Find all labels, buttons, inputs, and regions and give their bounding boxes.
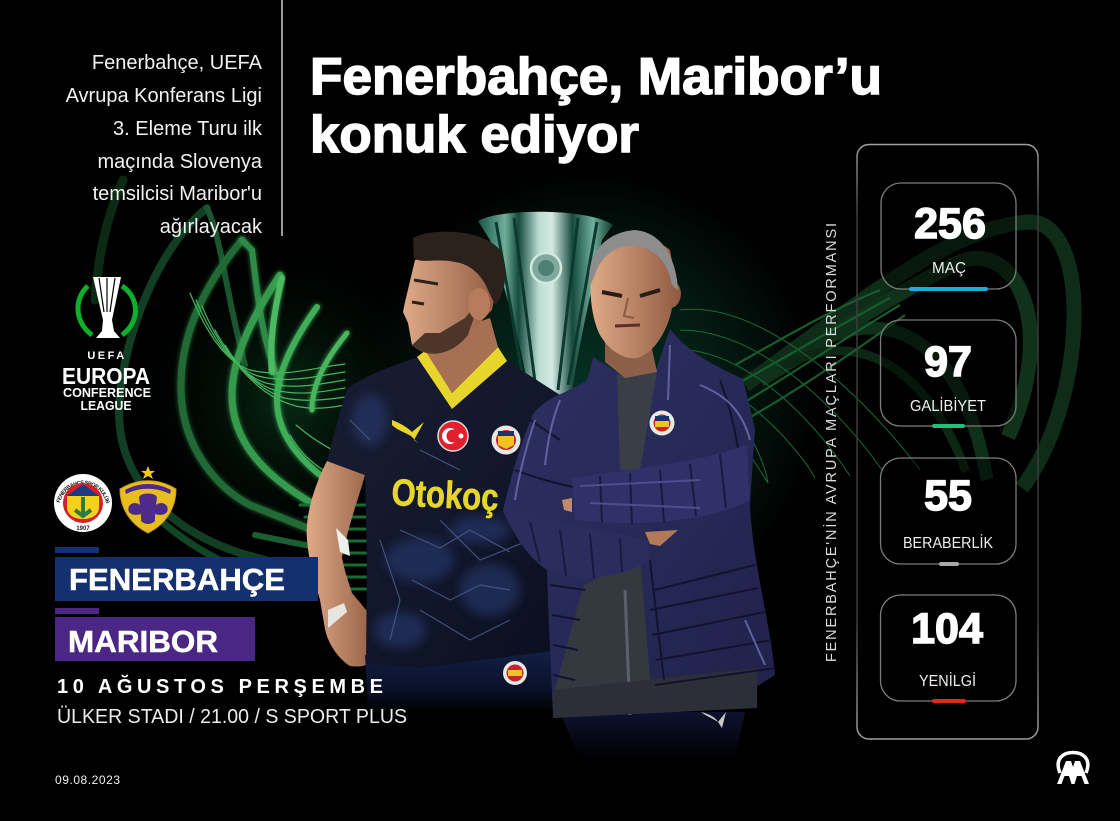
- neck and face: [426, 318, 498, 393]
- match venue: ÜLKER STADI / 21.00 / S SPORT PLUS: [57, 706, 407, 728]
- team bar: fenerbahce: [55, 547, 318, 601]
- player hair: [413, 232, 505, 305]
- title: Fenerbahçe, Maribor’u: [310, 48, 882, 106]
- quilt seams: [515, 380, 775, 685]
- intro text: Fenerbahçe, UEFA: [92, 52, 263, 74]
- intro text: maçında Slovenya: [97, 151, 263, 173]
- forearm lower: [505, 508, 650, 577]
- stat card: wins: GALİBİYET: [910, 396, 986, 415]
- manager: [503, 230, 775, 760]
- jacket highlights: [515, 345, 765, 665]
- green swirl right: [680, 222, 1074, 488]
- stat card: wins: [880, 320, 1016, 428]
- intro text: [66, 52, 263, 238]
- stat card: matches: MAÇ: [932, 260, 966, 277]
- stat card: draws: BERABERLİK: [903, 533, 993, 552]
- intro text: temsilcisi Maribor'u: [93, 183, 262, 205]
- logo: europa conference league: UEFA: [87, 350, 127, 362]
- logo: europa conference league: LEAGUE: [80, 398, 132, 413]
- hands: [562, 498, 572, 512]
- player arm: [307, 461, 378, 667]
- team bar: maribor: MARIBOR: [68, 624, 218, 659]
- panel: stats: [857, 144, 1038, 739]
- logo: maribor: [120, 466, 176, 533]
- stat card: draws: [880, 458, 1016, 566]
- manager neck: [605, 340, 657, 378]
- intro text: 3. Eleme Turu ilk: [113, 118, 263, 140]
- stat card: losses: 104: [911, 605, 983, 653]
- logo: fenerbahce: [54, 474, 112, 532]
- title: konuk ediyor: [310, 106, 639, 164]
- trophy: [478, 212, 613, 400]
- title: [310, 48, 882, 164]
- team bar: maribor: [55, 608, 255, 661]
- manager head: [590, 240, 681, 358]
- puma logo: [392, 420, 424, 443]
- stat card: wins: 97: [924, 338, 972, 386]
- team bar: fenerbahce: FENERBAHÇE: [69, 562, 285, 597]
- vertical stats heading: FENERBAHÇE'NİN AVRUPA MAÇLARI PERFORMANSI: [822, 223, 840, 662]
- jersey collar: [417, 347, 507, 409]
- stat card: draws: 55: [924, 472, 972, 520]
- sponsor: Otokoç: [391, 472, 500, 520]
- logo: fenerbahce: FENERBAHÇE SPOR KULÜBÜ: [56, 480, 110, 504]
- shorts crest: [503, 661, 527, 685]
- puma logo trousers: [701, 712, 726, 728]
- player shorts: [365, 640, 556, 712]
- green light swirl left: [95, 180, 372, 590]
- logo: europa conference league: EUROPA: [62, 363, 150, 389]
- logo: fenerbahce: 1907: [76, 526, 90, 532]
- logo: anadolu agency: [1057, 752, 1089, 784]
- manager eyes: [602, 290, 660, 296]
- logo: europa conference league: [62, 277, 151, 413]
- trousers: [560, 712, 745, 760]
- logo: europa conference league: CONFERENCE: [63, 385, 151, 400]
- player jersey: [327, 357, 560, 668]
- stat card: losses: [880, 595, 1016, 703]
- stat card: matches: 256: [914, 200, 986, 248]
- undershirt: [617, 372, 657, 470]
- stat card: matches: [881, 183, 1016, 291]
- jacket crest: [650, 410, 674, 436]
- jacket hem: [553, 668, 757, 718]
- stat card: losses: YENİLGİ: [919, 671, 976, 690]
- match date: 10 AĞUSTOS PERŞEMBE: [57, 674, 383, 698]
- crossed forearm upper: [572, 445, 750, 523]
- background glow: [120, 170, 830, 630]
- intro text: ağırlayacak: [160, 216, 263, 238]
- turkish flag crest: [438, 421, 468, 451]
- jacket: [503, 329, 775, 718]
- divider line: [281, 0, 283, 236]
- player: [307, 232, 560, 712]
- intro text: Avrupa Konferans Ligi: [66, 85, 262, 107]
- fenerbahce crest jersey: [492, 426, 520, 454]
- publication date: 09.08.2023: [55, 773, 120, 787]
